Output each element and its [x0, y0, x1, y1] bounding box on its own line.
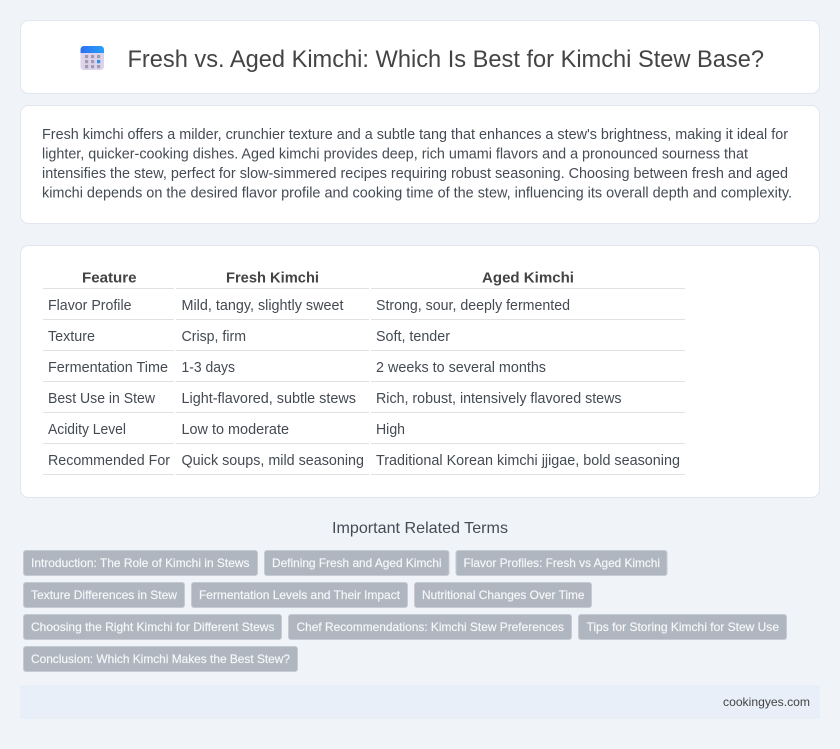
- table row: texture: Soft, tender: [376, 329, 450, 345]
- tag: Flavor Profiles: Fresh vs Aged Kimchi: [464, 556, 660, 570]
- table row: acidity level: Low to moderate: [182, 422, 289, 438]
- panel: comparison table: [20, 246, 820, 498]
- text block: summary paragraph: Fresh kimchi offers a milder, crunchier texture and a subtle tang that enhances a stew's brightness, making it ideal for: [42, 127, 788, 143]
- footer bar: [20, 685, 820, 719]
- table row: best use in stew: Light-flavored, subtle stews: [182, 391, 356, 407]
- table row: texture: Texture: [48, 329, 95, 345]
- tag: Choosing the Right Kimchi for Different Stews: [31, 620, 274, 634]
- table row: fermentation time: [43, 360, 685, 382]
- table row: best use in stew: [43, 391, 685, 412]
- heading: related terms: Important Related Terms: [332, 520, 508, 537]
- table row: fermentation time: 2 weeks to several months: [376, 360, 546, 376]
- table row: recommended for: Quick soups, mild seasoning: [182, 453, 364, 469]
- footer source text: cookingyes.com: [723, 695, 810, 709]
- tag: [24, 646, 298, 672]
- tag: [414, 582, 592, 608]
- table row: fermentation time: Fermentation Time: [48, 360, 168, 376]
- panel: title header: [20, 20, 820, 94]
- table row: acidity level: High: [376, 422, 405, 438]
- text block: summary paragraph: kimchi depends on the desired flavor profile and cooking time of the stew, influencing its overall depth and complexity.: [42, 186, 792, 202]
- table row: acidity level: [43, 422, 685, 444]
- text block: summary paragraph: lighter, quicker-cooking dishes. Aged kimchi provides deep, rich umami flavors and a pronounced sourness that: [42, 146, 748, 162]
- tag: Defining Fresh and Aged Kimchi: [272, 556, 442, 570]
- tag: [264, 550, 449, 576]
- table header row: Fresh Kimchi: [226, 270, 319, 286]
- table header row: [43, 270, 685, 288]
- tag: Chef Recommendations: Kimchi Stew Preferences: [296, 620, 564, 634]
- tag: [24, 614, 282, 640]
- tag: Introduction: The Role of Kimchi in Stews: [31, 556, 250, 570]
- icon: calendar: [80, 46, 104, 70]
- table row: flavor profile: Flavor Profile: [48, 298, 132, 314]
- tag: [192, 582, 408, 608]
- tag: Tips for Storing Kimchi for Stew Use: [586, 620, 779, 634]
- tag: Texture Differences in Stew: [31, 588, 177, 602]
- table row: texture: [43, 329, 685, 350]
- table row: fermentation time: 1-3 days: [182, 360, 235, 376]
- table row: flavor profile: Mild, tangy, slightly sweet: [182, 298, 344, 314]
- panel: introduction text: [20, 106, 820, 224]
- tag: [24, 550, 258, 576]
- table row: texture: Crisp, firm: [182, 329, 246, 345]
- table row: flavor profile: [43, 298, 685, 320]
- table row: best use in stew: Best Use in Stew: [48, 391, 155, 407]
- tag: [288, 614, 572, 640]
- related terms tags: [24, 550, 786, 672]
- tag: [578, 614, 786, 640]
- tag: Nutritional Changes Over Time: [422, 588, 585, 602]
- tag: [24, 582, 184, 608]
- table row: flavor profile: Strong, sour, deeply fermented: [376, 298, 570, 314]
- tag: Fermentation Levels and Their Impact: [199, 588, 401, 602]
- tag: [456, 550, 667, 576]
- table header row: Feature: [82, 270, 136, 286]
- text block: summary paragraph: [42, 127, 792, 202]
- table row: best use in stew: Rich, robust, intensively flavored stews: [376, 391, 622, 407]
- table row: recommended for: Traditional Korean kimchi jjigae, bold seasoning: [376, 453, 680, 469]
- text block: summary paragraph: intensifies the stew, perfect for slow-simmered recipes requiring robust seasoning. Choosing between fresh and aged: [42, 166, 788, 182]
- table row: acidity level: Acidity Level: [48, 422, 126, 438]
- table row: recommended for: Recommended For: [48, 453, 170, 469]
- tag: Conclusion: Which Kimchi Makes the Best Stew?: [31, 652, 290, 666]
- heading: title: Fresh vs. Aged Kimchi: Which Is Best for Kimchi Stew Base?: [128, 46, 764, 73]
- table row: recommended for: [43, 453, 685, 474]
- table header row: Aged Kimchi: [482, 270, 574, 286]
